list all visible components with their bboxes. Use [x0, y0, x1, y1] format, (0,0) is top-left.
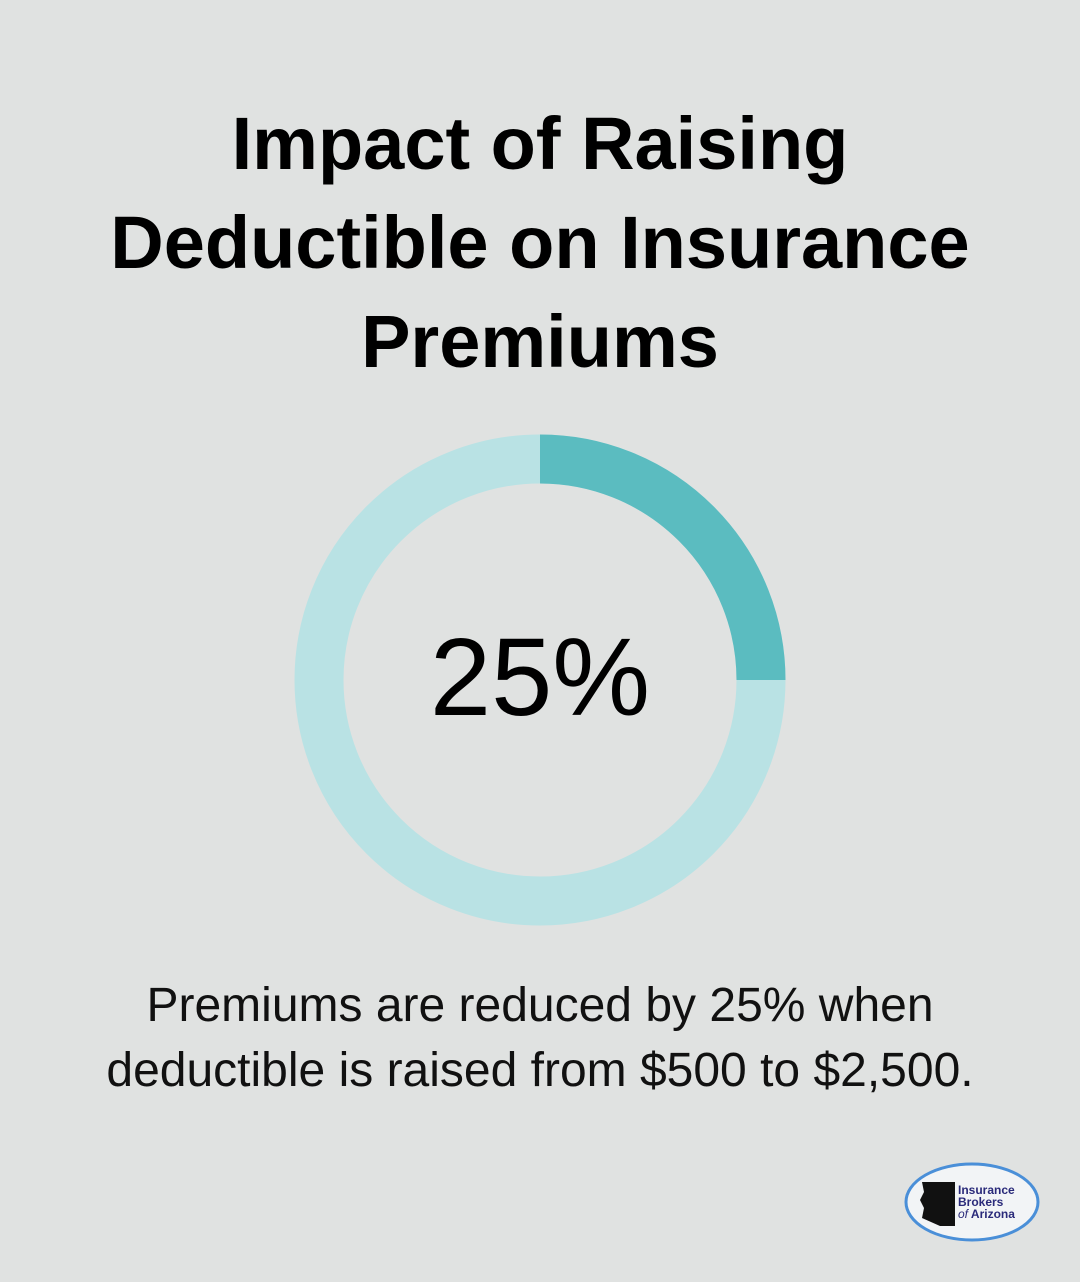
logo: Insurance: [958, 1183, 1015, 1197]
logo: [904, 1162, 1040, 1242]
donut chart: 25%: [430, 616, 650, 739]
title: Premiums: [361, 300, 719, 383]
description text: Premiums are reduced by 25% when: [146, 979, 934, 1032]
description text: deductible is raised from $500 to $2,500.: [106, 1044, 974, 1097]
description text: [106, 979, 974, 1097]
title: Impact of Raising: [232, 102, 848, 185]
logo: of Arizona: [958, 1207, 1015, 1221]
title: Deductible on Insurance: [110, 201, 970, 284]
logo: Brokers: [958, 1195, 1004, 1209]
title: [110, 102, 970, 383]
